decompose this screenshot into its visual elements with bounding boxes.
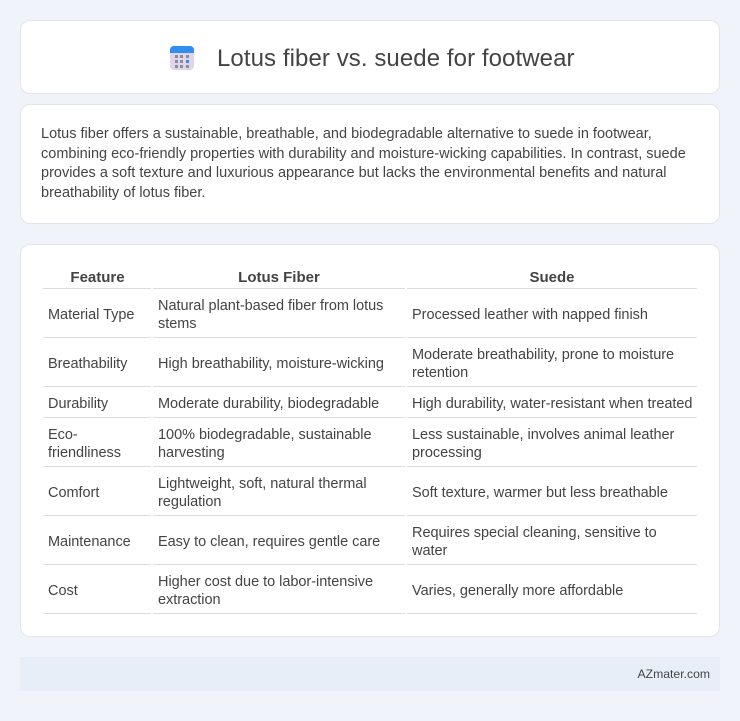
table header: Lotus Fiber: Lotus Fiber: [238, 269, 320, 286]
footer bar: [20, 657, 720, 691]
Material Type lotus: stems: [158, 316, 197, 332]
Comfort lotus: regulation: [158, 494, 221, 510]
Durability lotus: Moderate durability, biodegradable: [158, 396, 379, 412]
Maintenance suede: water: [412, 543, 447, 559]
Comfort lotus: [158, 476, 367, 510]
Material Type suede: Processed leather with napped finish: [412, 307, 648, 323]
Cost lotus: extraction: [158, 592, 221, 608]
Breathability suede: Moderate breathability, prone to moisture: [412, 347, 674, 363]
Material Type lotus: [158, 298, 383, 332]
intro paragraph: provides a soft texture and luxurious appearance but lacks the environmental benefits and natural: [41, 165, 666, 181]
row: Cost: Cost: [48, 583, 78, 599]
Eco-friendliness lotus: 100% biodegradable, sustainable: [158, 427, 372, 443]
row: Maintenance: Maintenance: [48, 534, 131, 550]
Comfort lotus: Lightweight, soft, natural thermal: [158, 476, 367, 492]
Durability suede: High durability, water-resistant when treated: [412, 396, 692, 412]
Breathability suede: retention: [412, 365, 468, 381]
Eco-friendliness lotus: [158, 427, 372, 461]
row: Material Type: Material Type: [48, 307, 134, 323]
Cost lotus: Higher cost due to labor-intensive: [158, 574, 373, 590]
table header: Suede: Suede: [529, 269, 574, 286]
row: Comfort: Comfort: [48, 485, 99, 501]
Material Type lotus: Natural plant-based fiber from lotus: [158, 298, 383, 314]
Eco-friendliness suede: Less sustainable, involves animal leather: [412, 427, 674, 443]
intro paragraph: Lotus fiber offers a sustainable, breathable, and biodegradable alternative to suede in footwear,: [41, 126, 652, 142]
table header: Feature: Feature: [70, 269, 125, 286]
Eco-friendliness suede: [412, 427, 674, 461]
intro paragraph: combining eco-friendly properties with durability and moisture-wicking capabilities. In contrast, suede: [41, 146, 686, 162]
panel: intro text: [20, 104, 720, 224]
row: Eco-friendliness: Eco-: [48, 427, 78, 443]
panel: title card: [20, 20, 720, 94]
Breathability suede: [412, 347, 674, 381]
icon: calendar: [170, 46, 194, 70]
row: Breathability: Breathability: [48, 356, 127, 372]
title: Lotus fiber vs. suede for footwear: [217, 45, 575, 72]
intro paragraph: [41, 126, 686, 200]
intro paragraph: breathability of lotus fiber.: [41, 184, 205, 200]
footer credit: AZmater.com: [638, 667, 710, 681]
Comfort suede: Soft texture, warmer but less breathable: [412, 485, 668, 501]
Maintenance lotus: Easy to clean, requires gentle care: [158, 534, 380, 550]
Cost lotus: [158, 574, 373, 608]
Breathability lotus: High breathability, moisture-wicking: [158, 356, 384, 372]
row: Eco-friendliness: friendliness: [48, 445, 121, 461]
Maintenance suede: [412, 525, 657, 559]
Maintenance suede: Requires special cleaning, sensitive to: [412, 525, 657, 541]
Eco-friendliness lotus: harvesting: [158, 445, 225, 461]
row: Durability: Durability: [48, 396, 108, 412]
panel: comparison table: [20, 244, 720, 637]
Cost suede: Varies, generally more affordable: [412, 583, 623, 599]
row: Eco-friendliness: [48, 427, 121, 461]
Eco-friendliness suede: processing: [412, 445, 482, 461]
